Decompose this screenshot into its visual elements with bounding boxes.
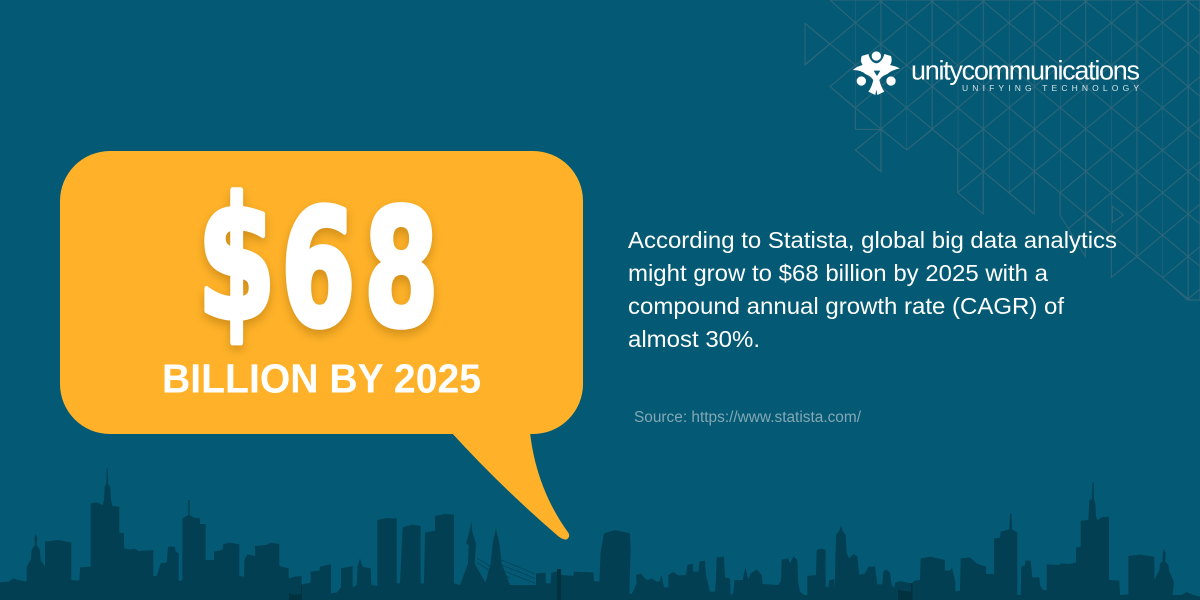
logo tagline: UNIFYING TECHNOLOGY [962,83,1139,93]
body paragraph: According to Statista, global big data analytics [628,227,1117,253]
body paragraph: might grow to $68 billion by 2025 with a [628,260,1049,286]
speech bubble [60,151,583,540]
subheading: billion by 2025: BILLION BY 2025 [162,356,481,402]
bubble tail [451,432,569,540]
body paragraph: almost 30%. [628,326,760,352]
logo wordmark: unitycommunications [911,56,1140,86]
body paragraph: compound annual growth rate (CAGR) of [628,293,1064,319]
skyline: bridge cables [477,558,535,583]
big number: $68: 8 [364,176,438,363]
bubble body [60,151,583,434]
skyline: darker foreground blocks [289,569,912,600]
body paragraph [628,227,1117,352]
big number: $68: 6 [281,176,355,363]
skyline: right section [800,482,1200,600]
city skyline [0,468,1200,600]
skyline: centre section [400,514,800,600]
logo icon [853,51,900,95]
background triangle lattice [805,0,1200,300]
logo [853,51,1140,95]
skyline: left section [0,468,400,600]
source line: Source: https://www.statista.com/ [634,409,862,426]
big number: $68 [198,161,438,363]
big number: $68: $ [198,161,276,358]
